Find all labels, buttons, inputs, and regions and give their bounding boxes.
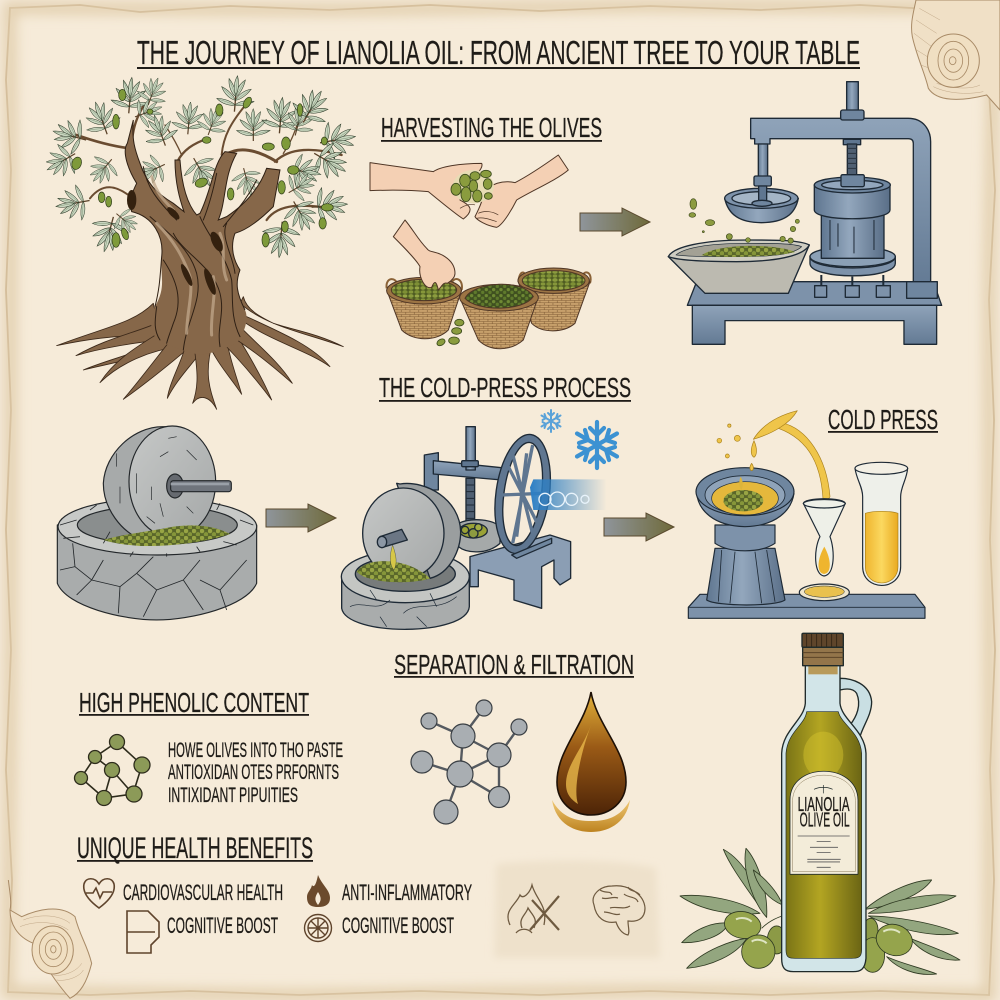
test tube <box>855 468 908 585</box>
falling olives <box>689 199 799 243</box>
bottle oil <box>786 712 862 958</box>
panel: faded icons <box>494 861 660 958</box>
icon: green molecule <box>74 734 150 806</box>
heading: separation and filtration: SEPARATION & FILTRATION <box>394 649 634 680</box>
illustration: olive branch right <box>861 880 960 974</box>
press frame column <box>751 118 931 287</box>
benefit: anti-inflammatory <box>307 875 472 907</box>
icon: heart <box>84 879 114 908</box>
icon: brain <box>593 886 645 935</box>
hanging bowl <box>725 144 798 223</box>
bottle cap <box>802 633 843 666</box>
decoration: top-right log scroll <box>912 0 1000 110</box>
icon: document shape <box>127 911 159 953</box>
icon: wheel <box>304 914 332 942</box>
bowl <box>697 493 794 527</box>
apparatus table <box>688 594 925 618</box>
benefit: anti-inflammatory: ANTI-INFLAMMATORY <box>342 880 472 905</box>
oil stream <box>717 411 830 507</box>
thin limbs <box>77 102 342 220</box>
cold stream <box>530 479 607 510</box>
machine frame <box>424 453 438 490</box>
text: phenolic description: INTIXIDANT PIPUITIES <box>168 784 298 807</box>
mill axle <box>167 474 231 498</box>
yellow dish <box>799 584 849 601</box>
press cylinder <box>810 257 895 276</box>
heading: high phenolic content: HIGH PHENOLIC CONTENT <box>79 687 309 718</box>
millstone axle and oil <box>377 529 407 570</box>
trunk highlights <box>152 177 227 335</box>
text: phenolic description <box>168 739 343 807</box>
basket left <box>387 277 462 339</box>
icon: oil drop <box>552 692 630 832</box>
illustration: wheel-press machine <box>341 427 607 629</box>
small press bowl <box>458 520 500 552</box>
millstone <box>363 483 461 579</box>
illustration: olive press machine <box>668 82 942 344</box>
text: phenolic description: HOWE OLIVES INTO THO PASTE <box>168 739 343 762</box>
top screw <box>847 82 858 112</box>
heading: the cold-press process: THE COLD-PRESS PROCESS <box>379 372 631 403</box>
basket right <box>518 268 591 331</box>
roots <box>57 297 343 409</box>
decoration: bottom-left log scroll <box>8 880 92 998</box>
hands holding olives <box>370 155 568 227</box>
arrow: harvesting to press <box>580 208 650 236</box>
benefit: cognitive boost left: COGNITIVE BOOST <box>167 913 278 938</box>
trunk outline <box>125 120 280 310</box>
basket center <box>460 284 538 349</box>
icon: small snowflake <box>542 410 560 432</box>
trunk fill <box>125 120 280 355</box>
stone trough with olives <box>668 240 809 293</box>
benefit: cognitive boost left <box>127 911 278 953</box>
arrow: mill to machine <box>266 504 336 532</box>
bottle neck oil fill <box>808 666 838 674</box>
heading: harvesting the olives: HARVESTING THE OLIVES <box>381 112 602 143</box>
sprigs of leaves <box>39 73 359 259</box>
flywheel <box>488 431 557 557</box>
press table <box>687 282 942 344</box>
millstone basin back <box>341 551 469 629</box>
heading: cold press <box>828 404 938 435</box>
tree olives <box>70 89 333 247</box>
heading: unique health benefits: UNIQUE HEALTH BENEFITS <box>77 832 313 865</box>
illustration: hands and baskets <box>370 155 591 349</box>
bottle handle <box>840 678 872 737</box>
text: phenolic description: ANTIOXIDAN OTES PRFORNTS <box>168 761 339 784</box>
benefit: cognitive boost right: COGNITIVE BOOST <box>342 913 454 938</box>
bowl stand <box>707 548 785 605</box>
bottle label: LIANOLIA <box>798 794 850 816</box>
machine base <box>470 535 571 608</box>
press screw <box>843 139 861 145</box>
arrow: machine to bowl <box>604 513 674 541</box>
illustration: stone mill <box>57 426 257 620</box>
bottle glass <box>782 665 866 972</box>
olive mash in basin <box>103 525 230 546</box>
benefit: cognitive boost right <box>304 913 454 942</box>
mill basin <box>57 498 257 620</box>
bottle label <box>790 771 858 874</box>
icon: grey molecule <box>411 700 527 824</box>
press feet <box>815 275 890 297</box>
picking hand <box>393 220 455 290</box>
benefit: cardiovascular health: CARDIOVASCULAR HEALTH <box>123 880 283 905</box>
bottle label: OLIVE OIL <box>800 810 850 832</box>
icon: large snowflake <box>577 422 617 468</box>
glass funnel <box>803 500 845 576</box>
trunk twists <box>143 167 257 350</box>
illustration: ancient olive tree <box>39 73 359 409</box>
illustration: oil collection apparatus <box>688 411 925 618</box>
mill wheel <box>103 426 216 542</box>
trunk hollows <box>127 190 225 296</box>
illustration: olive branch left <box>680 848 786 968</box>
icon: crossed flame <box>508 885 559 933</box>
loose olives <box>436 319 464 347</box>
icon: flame <box>307 875 330 907</box>
benefit: cardiovascular health <box>84 879 283 908</box>
millstone mash <box>357 561 430 582</box>
illustration: olive oil bottle <box>782 633 872 972</box>
